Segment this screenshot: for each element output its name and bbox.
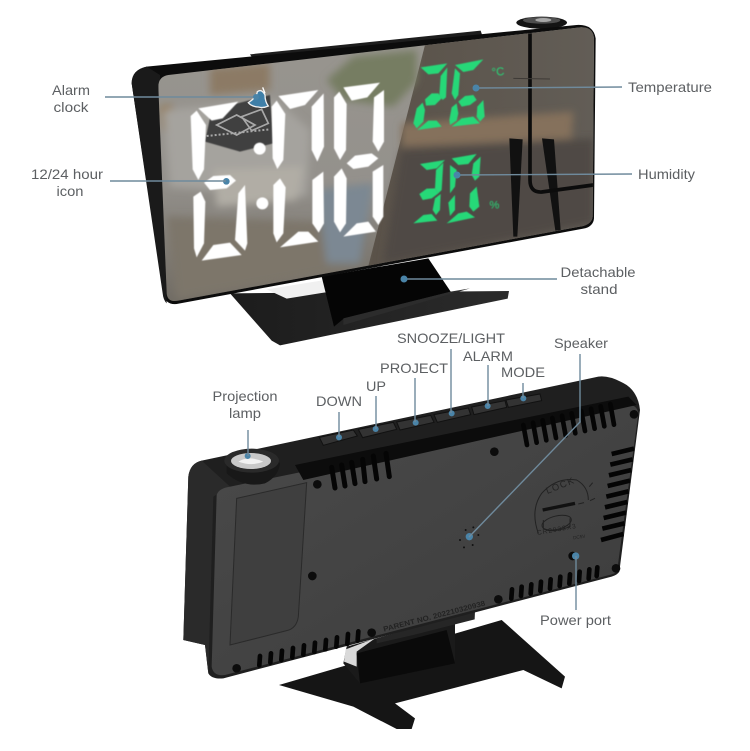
battery dial: CR2032X3 <box>536 523 577 537</box>
alarm bell icon <box>248 87 268 107</box>
callout: power port <box>540 556 611 628</box>
12/24 hour label pointer <box>223 178 230 185</box>
callout: humidity <box>454 166 695 182</box>
green humidity digits <box>413 154 499 223</box>
projection lamp <box>224 449 280 485</box>
back clock <box>183 376 640 729</box>
callout: detachable stand: Detachable <box>560 264 636 280</box>
patent text: PARENT NO. 202210320938 <box>382 599 486 634</box>
callout: SNOOZE/LIGHT <box>397 330 505 413</box>
rear vents: upper right <box>523 404 614 445</box>
green temperature digits: °C <box>491 66 505 79</box>
speaker holes <box>459 526 479 548</box>
callout: detachable stand <box>400 264 636 297</box>
rear face panel <box>212 405 638 675</box>
callout: ALARM <box>463 348 513 406</box>
callout: PROJECT: PROJECT <box>380 360 448 376</box>
power port <box>568 552 577 560</box>
callout: temperature: Temperature <box>628 79 712 95</box>
clock body <box>132 25 596 304</box>
battery compartment panel <box>230 483 307 645</box>
callout: DOWN <box>316 393 362 437</box>
callout: alarm clock <box>52 82 259 115</box>
callout: 12/24 hour icon <box>31 166 226 199</box>
callout dots <box>245 395 579 560</box>
battery dial: DC5V <box>573 534 587 540</box>
rear body <box>183 376 640 678</box>
callout: MODE <box>501 364 545 398</box>
front projection lamp <box>516 17 567 29</box>
callout: projection lamp: Projection <box>212 388 278 404</box>
callout: power port: Power port <box>540 612 611 628</box>
green humidity digits: % <box>489 199 499 211</box>
callout: ALARM: ALARM <box>463 348 513 364</box>
front top buttons <box>250 31 482 59</box>
callout: 12/24 hour icon: icon <box>56 183 84 199</box>
front clock <box>132 17 597 345</box>
white time digits <box>191 83 384 261</box>
mirror display reflection <box>157 23 597 307</box>
callout: speaker: Speaker <box>554 335 608 351</box>
rear vents: upper left <box>332 453 389 488</box>
rear stand <box>279 611 565 729</box>
table legs and frame reflection <box>509 138 523 237</box>
green temperature digits <box>413 59 505 130</box>
callout: MODE: MODE <box>501 364 545 380</box>
rear vents: bottom right <box>511 567 597 599</box>
callout: temperature <box>472 79 712 95</box>
callout: DOWN: DOWN <box>316 393 362 409</box>
screw holes <box>232 410 638 673</box>
cushion <box>205 95 273 152</box>
callout: alarm clock: Alarm <box>52 82 90 98</box>
callout: SNOOZE/LIGHT: SNOOZE/LIGHT <box>397 330 505 346</box>
rear vents: bottom left <box>259 631 358 665</box>
callout: detachable stand: stand <box>580 281 618 297</box>
callout: alarm clock: clock <box>54 99 90 115</box>
callout: projection lamp <box>212 388 278 456</box>
callout: speaker <box>469 335 608 537</box>
top-edge shading <box>295 397 637 480</box>
rear buttons <box>319 394 542 445</box>
rear vents: right side <box>601 449 634 540</box>
battery dial <box>535 475 595 540</box>
callout: UP <box>366 378 386 429</box>
callout: PROJECT <box>380 360 448 422</box>
callout: UP: UP <box>366 378 386 394</box>
detachable stand, front view <box>230 258 509 345</box>
callout: 12/24 hour icon: 12/24 hour <box>31 166 103 182</box>
battery dial: LOCK <box>544 475 576 496</box>
callout: humidity: Humidity <box>638 166 695 182</box>
callout: projection lamp: lamp <box>229 405 261 421</box>
